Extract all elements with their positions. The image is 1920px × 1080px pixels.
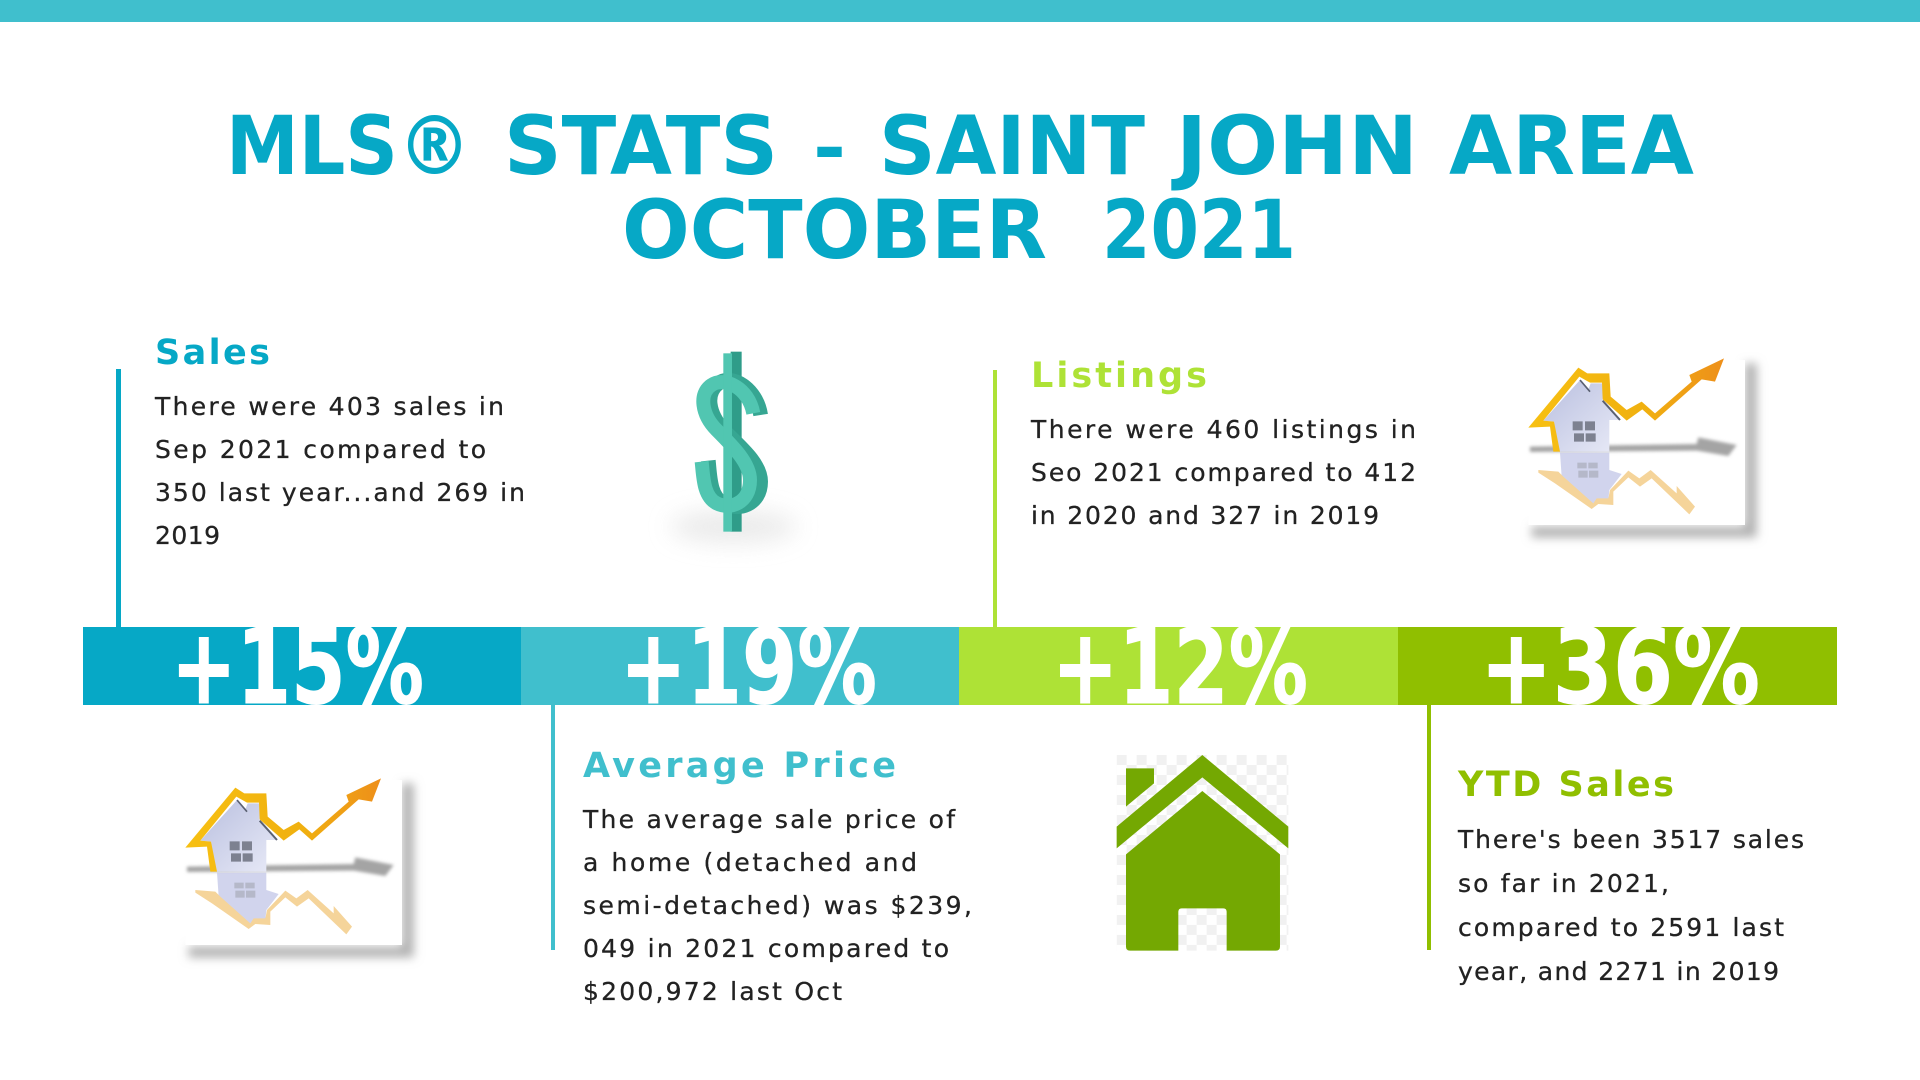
stat: ytd sales +36%: +36%	[1480, 606, 1760, 728]
text: sales body: There were 403 sales in	[154, 392, 504, 421]
text: listings body: Seo 2021 compared to 412	[1031, 458, 1416, 487]
title: AREA	[1449, 100, 1694, 194]
text: average price body	[582, 805, 972, 1006]
text: ytd sales body: year, and 2271 in 2019	[1458, 957, 1779, 986]
icon: house with rising arrow, sales	[185, 778, 414, 957]
text: ytd sales body: compared to 2591 last	[1458, 913, 1784, 942]
text: ytd sales body	[1457, 825, 1804, 986]
text: average price body: 049 in 2021 compared to	[583, 934, 949, 963]
text: listings body: in 2020 and 327 in 2019	[1031, 501, 1379, 530]
text: sales body: Sep 2021 compared to	[155, 435, 486, 464]
top band	[0, 0, 1920, 22]
panel: sales	[116, 333, 525, 627]
title: SAINT	[879, 100, 1145, 194]
stat: average price +19%: +19%	[620, 606, 877, 728]
text: average price body: $200,972 last Oct	[583, 977, 842, 1006]
panel: ytd sales	[1427, 705, 1804, 986]
icon: green house	[1117, 755, 1288, 951]
title	[226, 100, 1694, 278]
text: average price body: semi-detached) was $239,	[583, 891, 972, 920]
text: ytd sales body: so far in 2021,	[1458, 869, 1669, 898]
text: listings body: There were 460 listings in	[1030, 415, 1416, 444]
icon: house with rising arrow, listings	[1528, 358, 1757, 537]
heading: sales: Sales	[155, 333, 270, 373]
title: OCTOBER	[622, 184, 1047, 278]
percentage band	[83, 606, 1837, 728]
icon: dollar sign	[670, 352, 797, 543]
title: MLS®	[226, 100, 471, 194]
stat: sales +15%: +15%	[171, 606, 424, 728]
title: JOHN	[1171, 100, 1418, 194]
heading: average price: Average Price	[583, 746, 896, 786]
title: 2021	[1102, 184, 1296, 278]
stat: listings +12%: +12%	[1052, 606, 1308, 728]
text: average price body: a home (detached and	[583, 848, 917, 877]
text: ytd sales body: There's been 3517 sales	[1457, 825, 1804, 854]
panel: average price	[551, 705, 972, 1006]
panel: listings	[993, 356, 1416, 627]
text: sales body: 350 last year...and 269 in	[155, 478, 525, 507]
heading: ytd sales: YTD Sales	[1457, 765, 1674, 805]
text: sales body	[154, 392, 525, 550]
heading: listings: Listings	[1031, 356, 1207, 396]
title: STATS	[504, 100, 778, 194]
text: sales body: 2019	[155, 521, 220, 550]
text: average price body: The average sale price of	[582, 805, 956, 834]
text: listings body	[1030, 415, 1416, 530]
title: –	[814, 100, 845, 194]
